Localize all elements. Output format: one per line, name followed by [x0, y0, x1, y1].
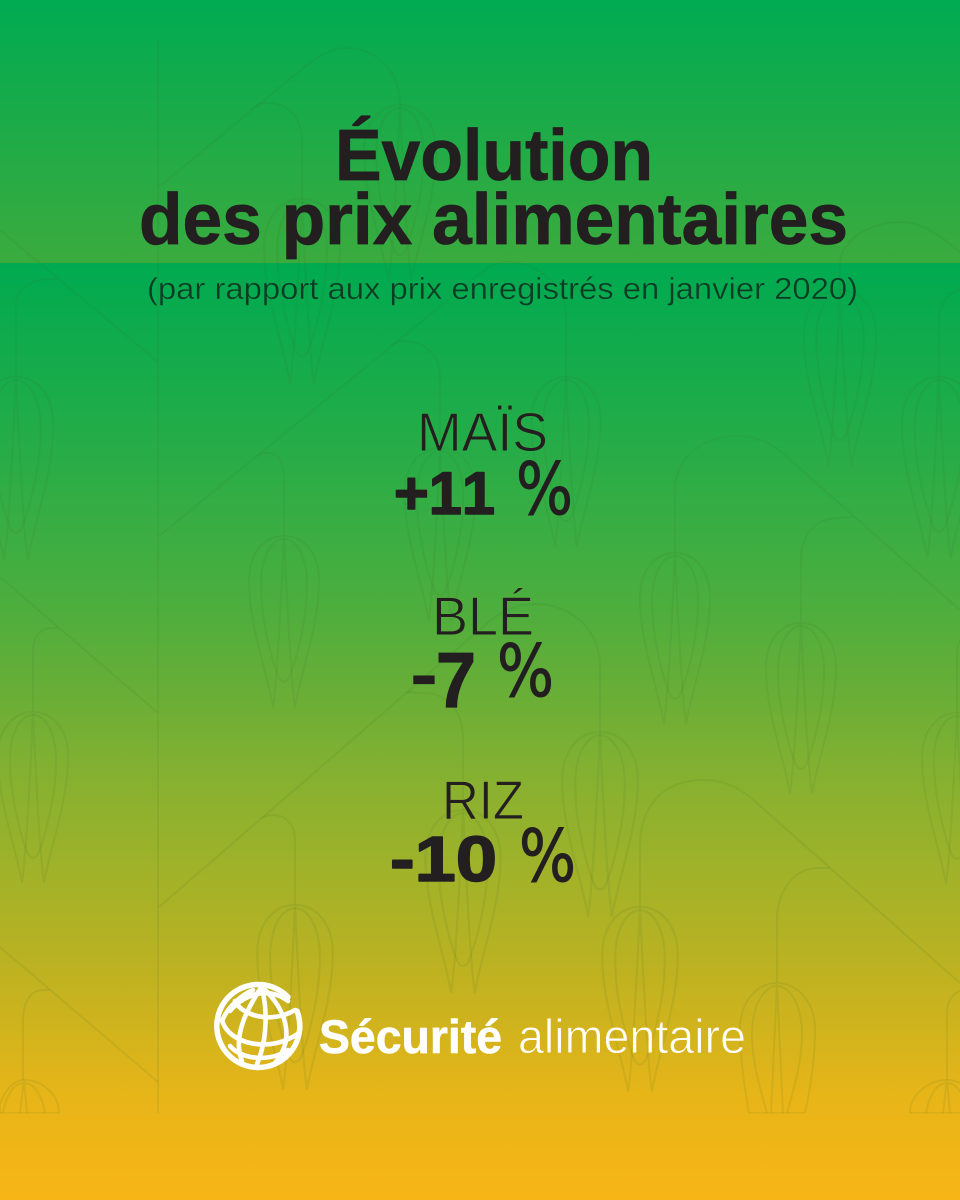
- value: -7 %: -: [411, 641, 437, 710]
- title: [139, 116, 848, 260]
- brand text: Sécurité: [319, 1010, 502, 1063]
- brand text: [319, 1010, 746, 1064]
- value: +11 %: [394, 447, 573, 531]
- title: des prix alimentaires: [139, 180, 848, 260]
- logo: globe and brand: [217, 984, 746, 1067]
- label: riz: RIZ: [442, 769, 524, 831]
- subtitle: (par rapport aux prix enregistrés en janvier 2020): [147, 271, 858, 306]
- value: +11 %: %: [516, 447, 573, 531]
- icon: globe: [217, 984, 300, 1067]
- value: -10 %: %: [519, 814, 576, 898]
- stat: blé: [411, 585, 554, 724]
- value: -7 %: %: [497, 629, 554, 713]
- label: maïs: MAÏS: [417, 401, 548, 463]
- value: -7 %: 7: [436, 636, 476, 724]
- label: blé: BLÉ: [432, 585, 534, 647]
- stat: riz: [390, 769, 576, 898]
- brand text: alimentaire: [518, 1011, 746, 1064]
- value: -7 %: [411, 629, 554, 724]
- value: -10 %: [390, 814, 576, 898]
- value: -10 %: -10: [390, 823, 497, 895]
- top gradient band: [0, 0, 960, 263]
- value: +11 %: +11: [394, 460, 495, 527]
- stat: maïs: [394, 401, 573, 531]
- title: Évolution: [335, 116, 653, 196]
